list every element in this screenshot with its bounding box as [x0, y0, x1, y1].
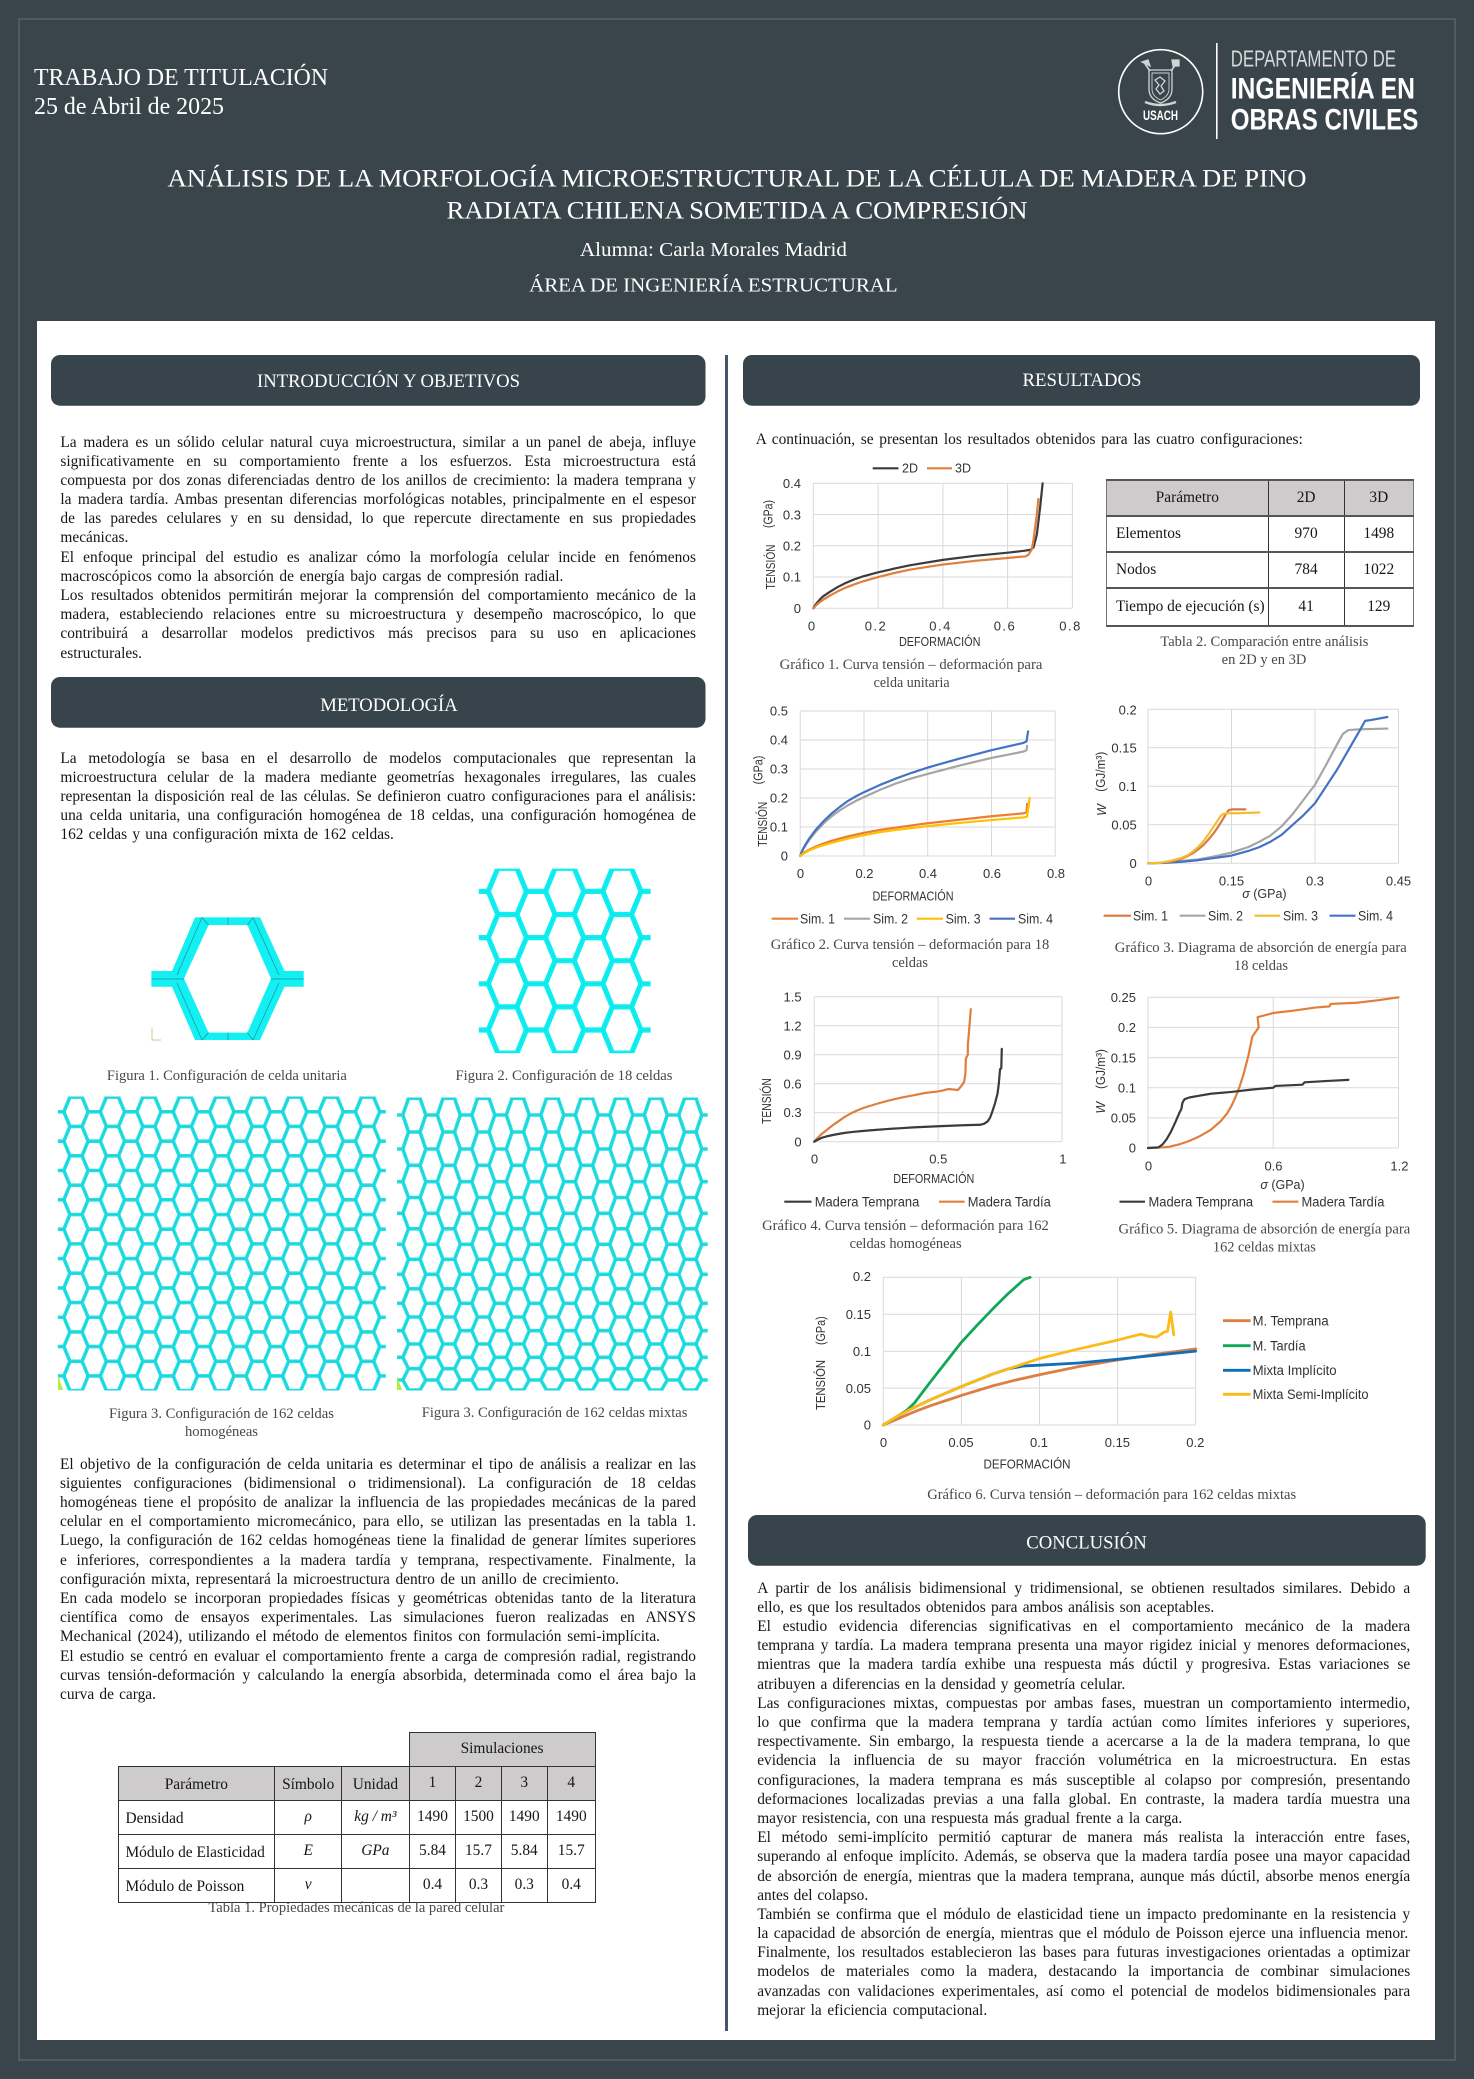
table 2 caption: en 2D y en 3D [1222, 652, 1307, 668]
legend: Madera Tardía [968, 1194, 1051, 1210]
figure 3: 162 homogeneous cells [58, 1096, 386, 1390]
heading: resultados: RESULTADOS [1022, 371, 1142, 391]
text: conclusion body: deformaciones localizadas previas a una falla global. En contraste, la madera tardía muestra una [757, 1791, 1410, 1808]
chart 6: stress-strain 162 mixed cells: 0.1 [853, 1344, 871, 1359]
chart 2: stress-strain 18 cells: 0.1 [770, 820, 788, 834]
chart 3 caption: 18 celdas [1234, 958, 1288, 974]
chart 5: energy absorption 162 mixed cells: 0.05 [1111, 1110, 1136, 1126]
chart 2: stress-strain 18 cells: 0 [797, 866, 804, 881]
table 1: mechanical properties: 5.84 [419, 1842, 446, 1859]
chart 4: stress-strain 162 homogeneous cells: TENSIÓN [759, 1078, 774, 1124]
text: introduction body: la madera tardía. Ambas presentan diferencias morfológicas notables, principalmente en el espesor [60, 491, 696, 508]
text: conclusion body: antes del colapso. [757, 1887, 868, 1904]
chart 1 caption: celda unitaria [874, 675, 950, 691]
chart 4: stress-strain 162 homogeneous cells: 1.5 [784, 990, 802, 1004]
chart 5: energy absorption 162 mixed cells: W [1094, 1101, 1108, 1114]
chart 4 caption [762, 1218, 1049, 1252]
chart 1: stress-strain unit cell: 0.4 [783, 476, 801, 491]
table 2: 2D vs 3D comparison: 1022 [1363, 561, 1394, 578]
chart 6: stress-strain 162 mixed cells: 0 [880, 1435, 887, 1450]
table 2: 2D vs 3D comparison: 41 [1298, 598, 1314, 615]
legend: Sim. 4 [1358, 908, 1393, 924]
chart 4: stress-strain 162 homogeneous cells: 0.6 [784, 1076, 802, 1092]
title: RADIATA CHILENA SOMETIDA A COMPRESIÓN [446, 197, 1028, 225]
text: introduction body: compuesta por dos zonas diferenciadas dentro de los anillos de crecimiento: la madera temprana y [60, 472, 696, 489]
author and area [529, 239, 898, 297]
chart 2: stress-strain 18 cells: TENSIÓN [755, 802, 770, 847]
title [168, 165, 1306, 225]
chart 2: stress-strain 18 cells: 0.2 [770, 790, 788, 806]
text: conclusion body: También se confirma que el módulo de elasticidad tiene un impacto predominante en la resistencia y [757, 1906, 1410, 1923]
chart 1: stress-strain unit cell: 0.3 [783, 508, 801, 522]
legend: Sim. 2 [1208, 908, 1243, 924]
text: introduction body: madera, estableciendo relaciones entre su microestructura y desempeño macroscópico, lo que [60, 606, 696, 623]
chart 1: stress-strain unit cell: 0.6 [994, 618, 1016, 634]
chart 4: stress-strain 162 homogeneous cells: 0.3 [784, 1105, 802, 1120]
table 1: mechanical properties: 0.4 [423, 1876, 442, 1893]
legend: Sim. 4 [1018, 912, 1053, 926]
chart 6: stress-strain 162 mixed cells: 0.15 [1105, 1435, 1130, 1450]
chart 6: stress-strain 162 mixed cells: 0.05 [948, 1435, 974, 1450]
column divider [725, 355, 728, 2031]
table 1: mechanical properties: 1490 [509, 1808, 540, 1825]
chart 3: energy absorption 18 cells: 0 [1145, 874, 1152, 888]
figure 1: unit cell [151, 917, 304, 1040]
text: introduction body: de las paredes celulares y en su densidad, lo que repercute directamente en sus propiedades [60, 510, 696, 527]
chart 4: stress-strain 162 homogeneous cells: 0 [794, 1134, 802, 1150]
table 1: mechanical properties: Densidad [126, 1810, 184, 1827]
chart 6: stress-strain 162 mixed cells: 0.1 [1030, 1435, 1048, 1450]
table 2: 2D vs 3D comparison: 784 [1295, 561, 1318, 578]
chart 5 caption: Gráfico 5. Diagrama de absorción de energía para [1119, 1222, 1411, 1238]
text: introduction body: significativamente en su comportamiento frente a los esfuerzos. Esta microestructura está [60, 453, 696, 470]
logo: USACH department: USACH [1143, 107, 1178, 123]
chart 1: stress-strain unit cell: TENSIÓN [763, 544, 778, 590]
table 2 caption: Tabla 2. Comparación entre análisis [1160, 634, 1369, 650]
figure 2: 18 cells [478, 868, 651, 1054]
chart 1: stress-strain unit cell: (GPa) [762, 500, 776, 528]
heading: metodología [51, 677, 706, 728]
text: methodology body: representan la disposición real de las células. Se definieron cuatro configuraciones para el análisis: [60, 788, 696, 805]
text: conclusion body: mejorar la eficiencia computacional. [757, 2002, 987, 2019]
chart 3: energy absorption 18 cells: 0.1 [1119, 779, 1137, 794]
text: methodology body: una celda unitaria, una configuración homogénea de 18 celdas, una configuración homogénea de [60, 807, 696, 824]
legend: Madera Temprana [815, 1194, 920, 1210]
chart 4: stress-strain 162 homogeneous cells: 0.5 [929, 1152, 947, 1166]
legend [1104, 908, 1393, 924]
chart 4: stress-strain 162 homogeneous cells [759, 990, 1067, 1210]
chart 3: energy absorption 18 cells: 0.05 [1111, 818, 1137, 832]
text: configurations explanation: e inferiores, correspondientes a la madera tardía y temprana, respectivamente. Finalmente, la [60, 1552, 696, 1569]
chart 2 caption: celdas [892, 955, 928, 971]
heading: conclusión [748, 1515, 1426, 1566]
text: conclusion body: respectivamente. Sin embargo, la respuesta tiende a acercarse a la de la madera temprana, lo que [757, 1733, 1410, 1750]
chart 2: stress-strain 18 cells: 0.5 [770, 704, 788, 718]
author and area: Alumna: Carla Morales Madrid [580, 239, 847, 261]
chart 3: energy absorption 18 cells: 0.45 [1386, 874, 1411, 888]
chart 4 caption: celdas homogéneas [850, 1236, 962, 1252]
text: introduction body: macroscópicos como la absorción de energía bajo cargas de compresión radial. [60, 568, 563, 585]
chart 1: stress-strain unit cell: 0.2 [783, 538, 801, 554]
text: configurations explanation: Mechanical (2024), utilizando el método de elementos finitos con formulación semi-implícita. [60, 1628, 660, 1645]
table 1 caption: Tabla 1. Propiedades mecánicas de la pared celular [208, 1900, 504, 1916]
chart 3: energy absorption 18 cells: 0.15 [1111, 740, 1137, 756]
figure captions [107, 1068, 688, 1440]
chart 1: stress-strain unit cell: 0.8 [1059, 618, 1082, 634]
chart 5 caption [1119, 1222, 1411, 1256]
chart 2: stress-strain 18 cells: DEFORMACIÓN [872, 889, 954, 904]
chart 1 caption: Gráfico 1. Curva tensión – deformación para [780, 657, 1043, 673]
table 1: mechanical properties [118, 1732, 596, 1902]
chart 3 caption [1115, 940, 1407, 974]
panel: white content area [37, 321, 1435, 2040]
text: conclusion body: superando al enfoque implícito. Además, se observa que la madera tardía posee una mayor capacidad [757, 1848, 1410, 1865]
figure captions: Figura 3. Configuración de 162 celdas [109, 1406, 334, 1422]
legend: Madera Temprana [1148, 1194, 1254, 1210]
table 1: mechanical properties: 1490 [556, 1808, 587, 1825]
table 2: 2D vs 3D comparison: 3D [1369, 489, 1388, 506]
chart 5: energy absorption 162 mixed cells: 0.2 [1118, 1020, 1136, 1035]
chart 3: energy absorption 18 cells: W [1095, 803, 1109, 816]
table 1: mechanical properties: 15.7 [465, 1842, 492, 1859]
figure 4: 162 mixed cells [397, 1082, 713, 1400]
text: configurations explanation: En cada modelo se incorporan propiedades físicas y geométricas obtenidas tanto de la literatura [60, 1590, 696, 1607]
chart 5 caption: 162 celdas mixtas [1213, 1240, 1316, 1256]
table 1: mechanical properties: 0.3 [469, 1876, 488, 1893]
figure captions: Figura 2. Configuración de 18 celdas [456, 1068, 673, 1084]
figure captions: homogéneas [185, 1424, 258, 1440]
chart 4: stress-strain 162 homogeneous cells: 0 [811, 1152, 818, 1166]
header: work type and date: TRABAJO DE TITULACIÓN [34, 64, 328, 91]
chart 6: stress-strain 162 mixed cells: 0.2 [853, 1269, 871, 1284]
table 2: 2D vs 3D comparison: 1498 [1363, 525, 1394, 542]
text: conclusion body: ello, es que los resultados obtenidos para ambos análisis son aceptables. [757, 1599, 1214, 1616]
text: introduction body: El enfoque principal del estudio es analizar cómo la morfología celular incide en fenómenos [60, 549, 696, 566]
table 2 caption [1160, 634, 1369, 668]
chart 5: energy absorption 162 mixed cells: 0.15 [1111, 1050, 1136, 1066]
text: configurations explanation [60, 1456, 696, 1703]
text: conclusion body: configuraciones, la madera temprana es más susceptible al colapso por compresión, presentando [757, 1772, 1410, 1789]
legend: Madera Tardía [1302, 1194, 1385, 1210]
chart 6: stress-strain 162 mixed cells: 0.2 [1186, 1435, 1204, 1450]
chart 3: energy absorption 18 cells: σ (GPa) [1242, 887, 1287, 901]
text: introduction body: contribuirá a desarrollar modelos predictivos más precisos para su uso en aplicaciones [60, 625, 696, 642]
chart 1: stress-strain unit cell: 0.2 [865, 618, 887, 634]
table 1: mechanical properties: Símbolo [282, 1776, 334, 1793]
text: methodology body [60, 750, 696, 843]
text: conclusion body: El método semi-implícito permitió capturar de manera más realista la interacción entre fases, [757, 1829, 1410, 1846]
table 1: mechanical properties: Unidad [353, 1776, 398, 1793]
chart 6: stress-strain 162 mixed cells: 0.05 [846, 1381, 871, 1396]
table 1: mechanical properties: 1490 [417, 1808, 448, 1825]
table 1: mechanical properties: 2 [475, 1774, 482, 1791]
chart 3: energy absorption 18 cells [1094, 702, 1411, 924]
chart 2: stress-strain 18 cells: 0.2 [855, 866, 874, 881]
legend: Sim. 1 [800, 912, 835, 926]
text: introduction body: Los resultados obtenidos permitirán mejorar la comprensión del comportamiento mecánico de la [60, 587, 696, 604]
table 1: mechanical properties: E [303, 1842, 313, 1859]
legend [772, 912, 1053, 926]
table 2: 2D vs 3D comparison: 970 [1295, 525, 1318, 542]
text: configurations explanation: curvas tensión-deformación y calculando la energía absorbida, determinada como el área bajo la [60, 1667, 696, 1684]
text: conclusion body: El estudio evidencia diferencias significativas en el comportamiento mecánico de la madera [757, 1618, 1410, 1635]
legend: Sim. 1 [1133, 908, 1168, 924]
heading: metodología: METODOLOGÍA [320, 694, 458, 716]
chart 1: stress-strain unit cell: DEFORMACIÓN [899, 634, 980, 649]
table 1: mechanical properties: 0.4 [562, 1876, 581, 1893]
legend: Sim. 2 [873, 912, 908, 926]
legend: M. Temprana [1253, 1314, 1329, 1328]
chart 5: energy absorption 162 mixed cells: (GJ/m³) [1094, 1049, 1108, 1089]
chart 1 caption [780, 657, 1043, 691]
heading: introducción y objetivos [51, 355, 706, 406]
chart 3: energy absorption 18 cells: (GJ/m³) [1094, 752, 1108, 792]
title: ANÁLISIS DE LA MORFOLOGÍA MICROESTRUCTURAL DE LA CÉLULA DE MADERA DE PINO [168, 165, 1306, 193]
legend: 3D [955, 462, 971, 476]
legend [1120, 1194, 1385, 1210]
text: conclusion body: modelos de materiales como la madera, destacando la importancia de combinar simulaciones [757, 1963, 1410, 1980]
table 1: mechanical properties: 4 [567, 1774, 575, 1791]
text: conclusion body: atribuyen a diferencias en la densidad y geometría celular. [757, 1676, 1125, 1693]
text: configurations explanation: El estudio se centró en evaluar el comportamiento frente a carga de compresión radial, registrando [60, 1648, 696, 1665]
chart 5: energy absorption 162 mixed cells: σ (GPa) [1260, 1178, 1305, 1192]
chart 2: stress-strain 18 cells: 0.4 [770, 732, 788, 748]
header: work type and date [34, 64, 328, 120]
table 2: 2D vs 3D comparison: Parámetro [1156, 489, 1219, 506]
table 2: 2D vs 3D comparison: Elementos [1116, 525, 1181, 542]
text: conclusion body: Finalmente, los resultados establecieron las bases para futuras investigaciones orientadas a optimizar [757, 1944, 1410, 1961]
table 1: mechanical properties: GPa [361, 1842, 390, 1859]
chart 3: energy absorption 18 cells: 0.3 [1306, 874, 1324, 888]
chart 2: stress-strain 18 cells: 0.8 [1047, 866, 1065, 881]
legend: Sim. 3 [946, 912, 981, 926]
table 2: 2D vs 3D comparison: 2D [1297, 489, 1316, 506]
table 2: 2D vs 3D comparison [1106, 479, 1414, 627]
chart 2: stress-strain 18 cells: 0 [781, 848, 788, 864]
text: conclusion body: de absorción de energía, mientras que la madera temprana, aunque más dúctil, absorbe menos energía [757, 1868, 1410, 1884]
figure captions: Figura 1. Configuración de celda unitaria [107, 1068, 347, 1084]
text: conclusion body [757, 1580, 1410, 2019]
table 2: 2D vs 3D comparison: Tiempo de ejecución (s) [1116, 598, 1265, 615]
logo: USACH department: OBRAS CIVILES [1231, 103, 1418, 136]
table 1: mechanical properties: 15.7 [558, 1842, 585, 1859]
text: conclusion body: Las configuraciones mixtas, compuestas por ambas fases, muestran un comportamiento intermedio, [757, 1695, 1410, 1712]
table 1: mechanical properties: 1500 [463, 1808, 494, 1825]
chart 4: stress-strain 162 homogeneous cells: 0.9 [784, 1048, 802, 1062]
heading: conclusión: CONCLUSIÓN [1026, 1531, 1147, 1553]
table 1: mechanical properties: kg / m³ [354, 1808, 397, 1825]
legend [784, 1194, 1051, 1210]
legend: Mixta Implícito [1253, 1363, 1337, 1378]
text: methodology body: 162 celdas y una configuración mixta de 162 celdas. [60, 826, 394, 843]
text: conclusion body: la capacidad de absorción de energía, mientras que el módulo de Poisson ejerce una influencia menor. [757, 1925, 1408, 1942]
text: configurations explanation: configuración mixta, representará la microestructura dentro de un anillo de crecimiento. [60, 1571, 619, 1588]
author and area: ÁREA DE INGENIERÍA ESTRUCTURAL [529, 274, 898, 297]
text: conclusion body: A partir de los análisis bidimensional y tridimensional, se obtienen resultados similares. Debido a [757, 1580, 1410, 1597]
legend: Mixta Semi-Implícito [1253, 1387, 1369, 1402]
chart 4: stress-strain 162 homogeneous cells: 1.2 [784, 1018, 802, 1034]
logo: USACH department [1119, 43, 1418, 139]
chart 6: stress-strain 162 mixed cells: (GPa) [814, 1316, 828, 1345]
logo: USACH department: INGENIERÍA EN [1231, 71, 1415, 105]
chart 5: energy absorption 162 mixed cells: 0 [1145, 1158, 1152, 1174]
table 1: mechanical properties: v [305, 1876, 312, 1893]
text: methodology body: microestructura celular de la madera mediante geometrías hexagonales irregulares, las cuales [60, 769, 696, 786]
chart 1: stress-strain unit cell [762, 462, 1082, 649]
chart 2 caption [771, 937, 1049, 971]
legend: Sim. 3 [1283, 908, 1318, 924]
text: configurations explanation: celular en el comportamiento micromecánico, para ello, se utilizan las presentadas en la tabla 1. [60, 1513, 696, 1530]
chart 5: energy absorption 162 mixed cells [1094, 990, 1408, 1210]
chart 5: energy absorption 162 mixed cells: 0 [1129, 1140, 1136, 1156]
text: configurations explanation: siguientes configuraciones (bidimensional o tridimensional). La configuración de 18 celdas [60, 1475, 696, 1492]
heading: resultados [743, 355, 1420, 406]
chart 1: stress-strain unit cell: 0.1 [783, 570, 801, 584]
table 1: mechanical properties: Módulo de Poisson [126, 1878, 244, 1895]
chart 2: stress-strain 18 cells: 0.6 [983, 866, 1001, 881]
legend: 2D [902, 462, 918, 476]
table 2: 2D vs 3D comparison: Nodos [1116, 561, 1156, 578]
chart 6: stress-strain 162 mixed cells [813, 1269, 1369, 1472]
chart 3 caption: Gráfico 3. Diagrama de absorción de energía para [1115, 940, 1407, 956]
chart 3: energy absorption 18 cells: 0 [1129, 856, 1137, 871]
legend [1223, 1314, 1369, 1402]
table 1: mechanical properties: 5.84 [511, 1842, 538, 1859]
text: conclusion body: lo que confirma que la madera temprana y tardía actúan como límites inferiores y superiores, [757, 1714, 1410, 1731]
logo: USACH department: DEPARTAMENTO DE [1231, 46, 1396, 72]
table 1: mechanical properties: 3 [520, 1774, 528, 1791]
chart 5: energy absorption 162 mixed cells: 0.25 [1111, 990, 1136, 1005]
chart 6: stress-strain 162 mixed cells: 0.15 [846, 1307, 871, 1322]
chart 5: energy absorption 162 mixed cells: 1.2 [1390, 1158, 1408, 1174]
chart 6: stress-strain 162 mixed cells: TENSIÓN [813, 1360, 828, 1410]
text: configurations explanation: curva de carga. [60, 1686, 156, 1703]
table 1: mechanical properties: ρ [304, 1808, 312, 1825]
chart 4 caption: Gráfico 4. Curva tensión – deformación para 162 [762, 1218, 1049, 1234]
chart 3: energy absorption 18 cells: 0.15 [1219, 874, 1244, 888]
chart 6: stress-strain 162 mixed cells: 0 [864, 1418, 871, 1432]
text: results intro: A continuación, se presentan los resultados obtenidos para las cuatro configuraciones: [756, 431, 1303, 448]
table 2: 2D vs 3D comparison: 129 [1367, 598, 1390, 615]
text: methodology body: La metodología se basa en el desarrollo de modelos computacionales que representan la [60, 750, 696, 767]
table 1: mechanical properties: Módulo de Elasticidad [126, 1844, 265, 1861]
chart 2 caption: Gráfico 2. Curva tensión – deformación para 18 [771, 937, 1049, 953]
table 1: mechanical properties: 0.3 [515, 1876, 534, 1893]
icon: university crest [1142, 60, 1179, 105]
chart 2: stress-strain 18 cells: 0.3 [770, 762, 788, 776]
text: conclusion body: temprana y tardía. La madera temprana presenta una mayor rigidez inicial y menores deformaciones, [757, 1637, 1410, 1654]
chart 2: stress-strain 18 cells [752, 704, 1065, 926]
text: introduction body: mecánicas. [60, 529, 128, 546]
text: conclusion body: evidencia la influencia de su mayor fracción volumétrica en la microestructura. En estas [757, 1752, 1410, 1769]
chart 5: energy absorption 162 mixed cells: 0.6 [1264, 1158, 1283, 1174]
chart 6 caption: Gráfico 6. Curva tensión – deformación para 162 celdas mixtas [927, 1487, 1296, 1503]
text: configurations explanation: científica como de ensayos experimentales. Las simulaciones fueron realizadas en ANSYS [60, 1609, 696, 1626]
text: introduction body: La madera es un sólido celular natural cuya microestructura, similar a un panel de abeja, influye [60, 434, 696, 450]
chart 2: stress-strain 18 cells: 0.4 [919, 866, 937, 881]
text: configurations explanation: Luego, la configuración de 162 celdas homogéneas tiene la finalidad de generar límites superiores [60, 1532, 696, 1549]
chart 1: stress-strain unit cell: 0 [808, 618, 815, 634]
table 1: mechanical properties: Parámetro [165, 1776, 228, 1793]
table 1: mechanical properties: Simulaciones [461, 1740, 544, 1757]
header: work type and date: 25 de Abril de 2025 [34, 94, 224, 120]
text: conclusion body: mayor resistencia, con una respuesta más gradual frente a la carga. [757, 1810, 1182, 1827]
chart 4: stress-strain 162 homogeneous cells: DEFORMACIÓN [893, 1171, 974, 1186]
legend [873, 462, 971, 476]
table 1: mechanical properties: 1 [429, 1774, 436, 1791]
text: configurations explanation: homogéneas tiene el propósito de analizar la influencia de las propiedades mecánicas de la pared [60, 1494, 696, 1511]
chart 6: stress-strain 162 mixed cells: DEFORMACIÓN [984, 1456, 1070, 1472]
text: introduction body: estructurales. [60, 645, 142, 662]
legend: M. Tardía [1253, 1338, 1306, 1354]
text: introduction body [60, 434, 696, 662]
chart 1: stress-strain unit cell: 0 [794, 601, 801, 616]
chart 4: stress-strain 162 homogeneous cells: 1 [1059, 1152, 1067, 1166]
text: conclusion body: avanzadas con validaciones experimentales, así como el potencial de modelos bidimensionales para [757, 1983, 1410, 2000]
chart 1: stress-strain unit cell: 0.4 [929, 618, 952, 634]
text: conclusion body: mientras que la madera tardía exhibe una respuesta más dúctil y progresiva. Estas variaciones se [757, 1656, 1410, 1673]
figure captions: Figura 3. Configuración de 162 celdas mixtas [422, 1405, 688, 1421]
chart 3: energy absorption 18 cells: 0.2 [1119, 702, 1137, 718]
heading: introducción y objetivos: INTRODUCCIÓN Y OBJETIVOS [257, 370, 520, 392]
text: configurations explanation: El objetivo de la configuración de celda unitaria es determinar el tipo de análisis a realizar en las [60, 1456, 696, 1473]
chart 5: energy absorption 162 mixed cells: 0.1 [1118, 1080, 1136, 1096]
chart 2: stress-strain 18 cells: (GPa) [752, 756, 766, 784]
